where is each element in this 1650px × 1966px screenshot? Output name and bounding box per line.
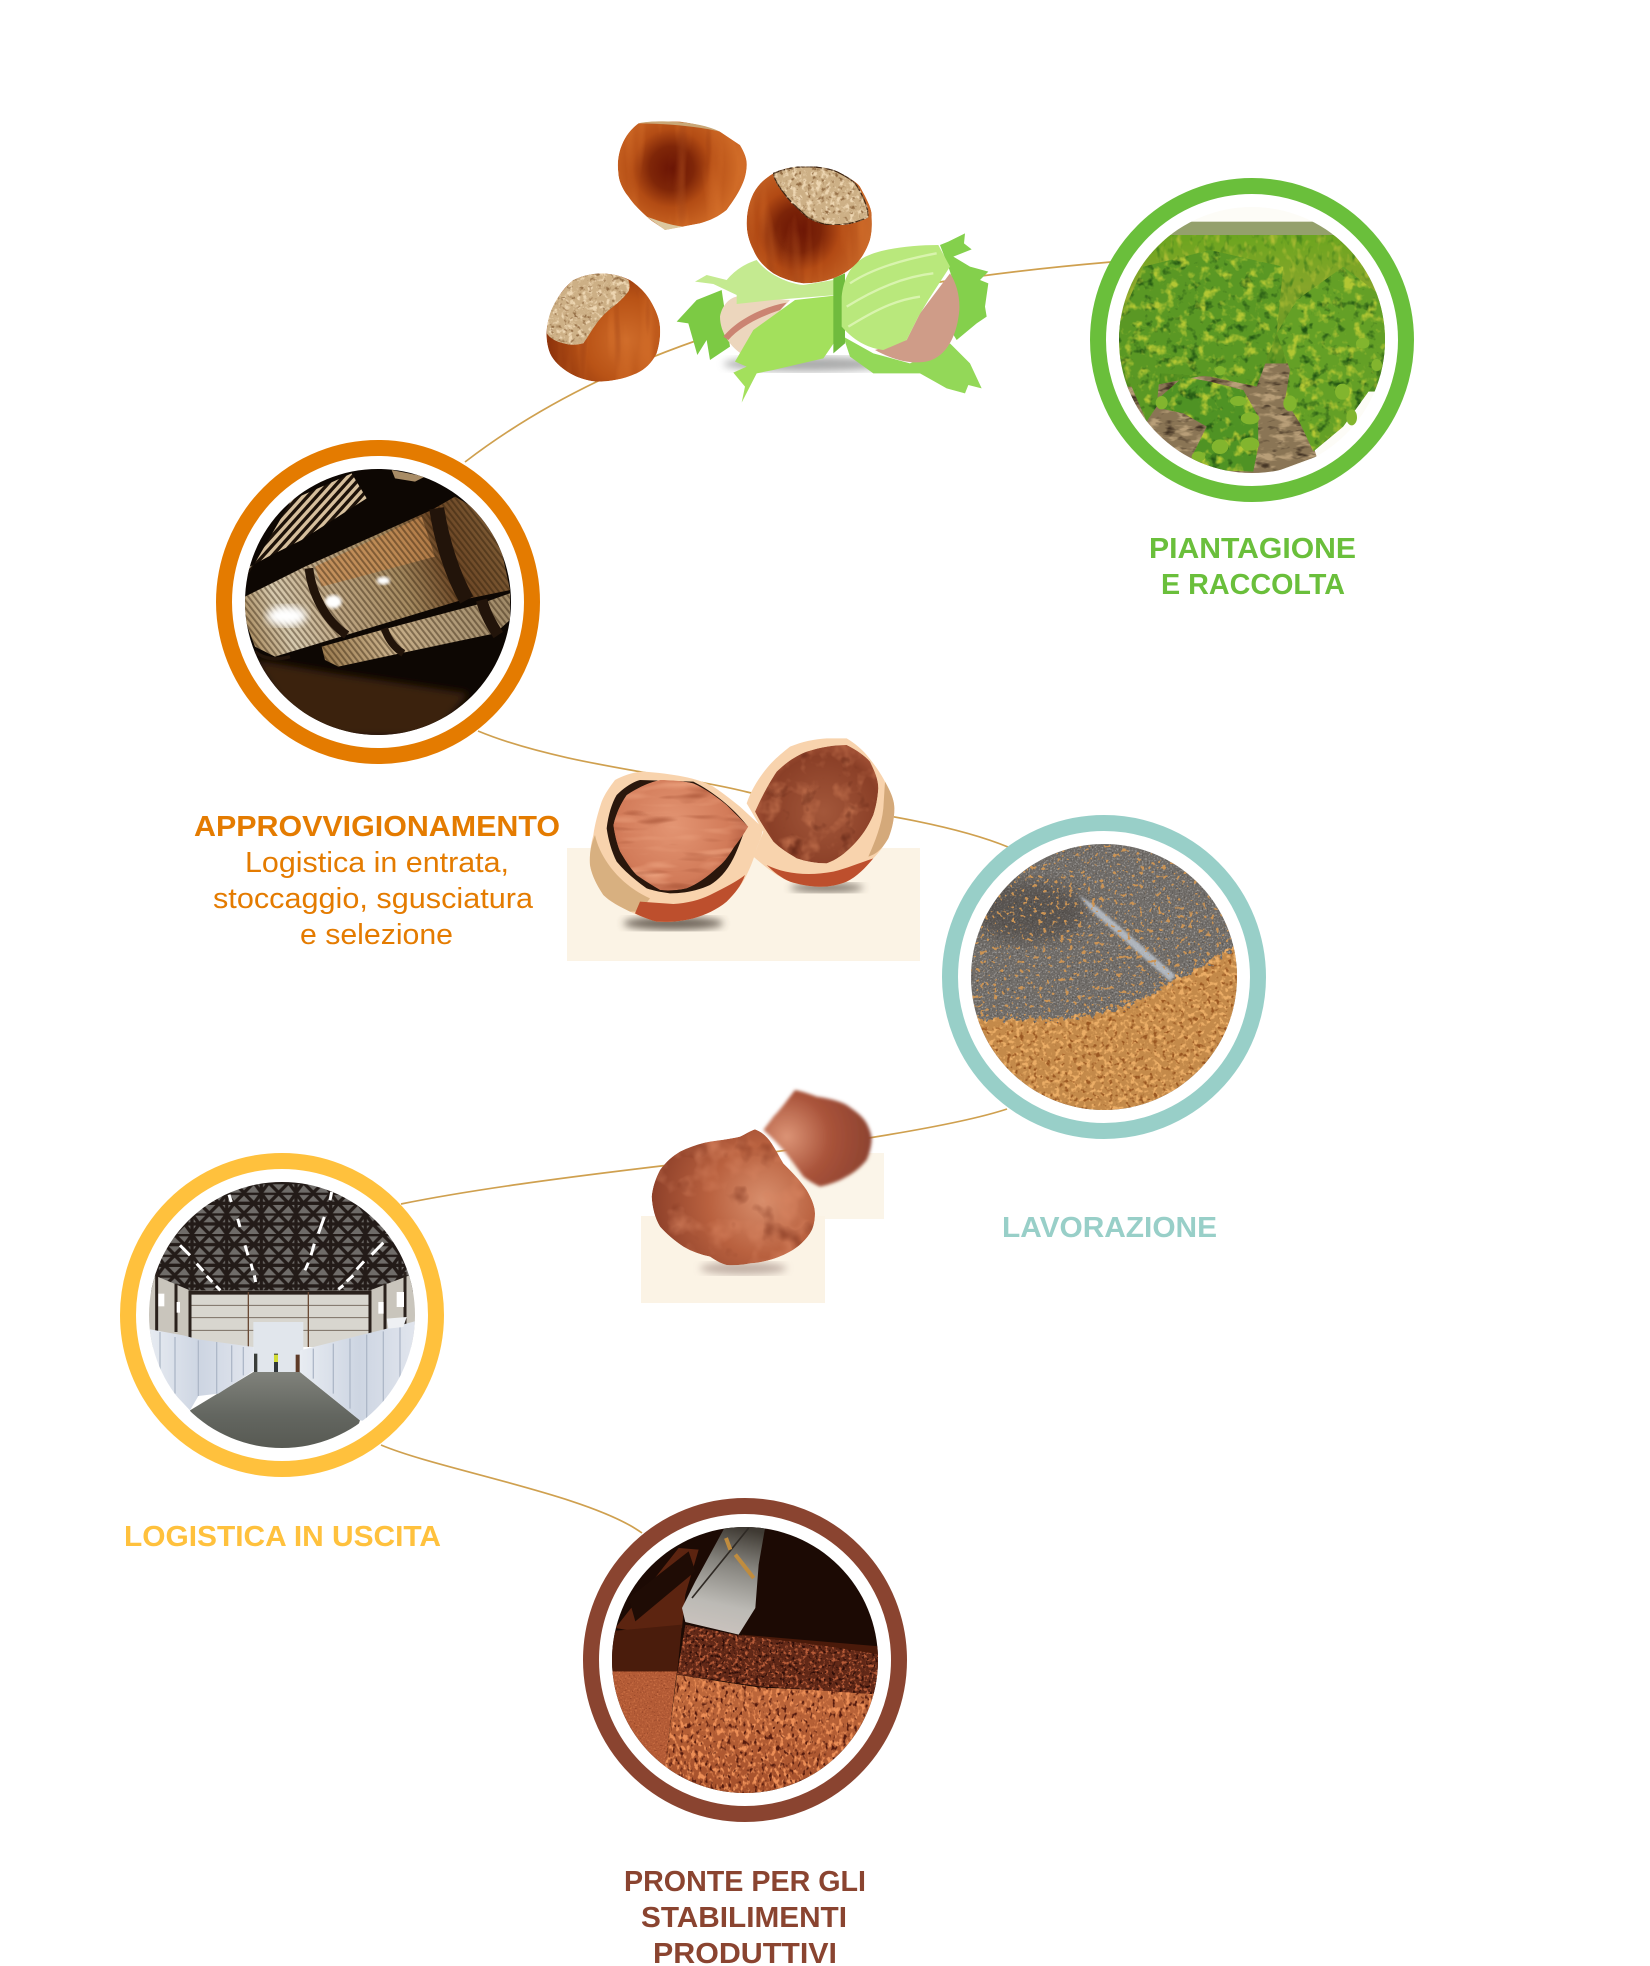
illustration: cracked hazelnut <box>590 738 894 930</box>
ring <box>128 1161 436 1469</box>
shadow under husk <box>723 357 890 371</box>
top nut <box>618 121 747 230</box>
left husk front flap <box>733 295 840 403</box>
step 4 label: LOGISTICA IN USCITA <box>124 1521 441 1553</box>
photo: chute pouring grain <box>612 1527 878 1793</box>
ring <box>224 448 532 756</box>
ring <box>950 823 1258 1131</box>
step 3: processing <box>950 823 1258 1131</box>
photo: warehouse <box>149 1182 415 1448</box>
front kernel <box>652 1129 815 1265</box>
connector: procurement to processing <box>478 731 1008 847</box>
step 5 label <box>624 1866 866 1966</box>
right back leaves <box>940 233 988 340</box>
illustration: cream panels behind kernels <box>641 1153 884 1303</box>
middle nut <box>747 167 872 283</box>
step 5: ready for plants <box>591 1506 899 1814</box>
step 2 label: APPROVVIGIONAMENTO <box>194 811 560 843</box>
step 5 label: STABILIMENTI <box>641 1902 847 1934</box>
left nut <box>546 273 660 382</box>
illustration: hazelnuts in green husk <box>546 121 988 403</box>
step 1 label: PIANTAGIONE <box>1149 533 1356 565</box>
right pink nut <box>875 273 959 362</box>
left back leaf <box>677 290 730 360</box>
photo: sieving drums <box>245 469 511 735</box>
step 1 label <box>1149 533 1356 601</box>
left pink nut <box>720 297 790 355</box>
connector: outbound logistics to plants <box>381 1445 642 1533</box>
right husk main <box>842 245 950 350</box>
ring <box>1098 186 1406 494</box>
left half shell <box>590 772 763 922</box>
step 2 label: e selezione <box>300 919 453 951</box>
nut shadows <box>623 917 723 930</box>
step 2 label: Logistica in entrata, <box>245 847 509 879</box>
husk stem <box>833 273 845 353</box>
ring <box>591 1506 899 1814</box>
step 3 label: LAVORAZIONE <box>1002 1212 1217 1244</box>
right half shell <box>747 738 894 887</box>
left husk top flap <box>695 260 837 304</box>
step 2 label <box>194 811 560 951</box>
blurred back kernel <box>763 1090 872 1187</box>
step 2: procurement <box>224 448 532 756</box>
illustration: cream panel behind shelled nuts <box>567 848 920 961</box>
photo: grain on mesh <box>971 844 1237 1110</box>
kernel shadow <box>700 1262 787 1274</box>
bottom right leaf <box>843 337 982 393</box>
connector: plantation to procurement <box>465 262 1111 462</box>
step 1 label: E RACCOLTA <box>1161 569 1345 601</box>
step 5 label: PRONTE PER GLI <box>624 1866 866 1898</box>
step 1: plantation and harvest <box>1098 186 1406 494</box>
step 2 label: stoccaggio, sgusciatura <box>213 883 534 915</box>
photo: hazelnut orchard <box>1119 222 1385 473</box>
connector: processing to outbound logistics <box>401 1109 1007 1204</box>
illustration: two peeled kernels <box>652 1090 872 1274</box>
infographic: hazelnut supply chain <box>120 121 1414 1964</box>
step 4: outbound logistics <box>128 1161 436 1469</box>
